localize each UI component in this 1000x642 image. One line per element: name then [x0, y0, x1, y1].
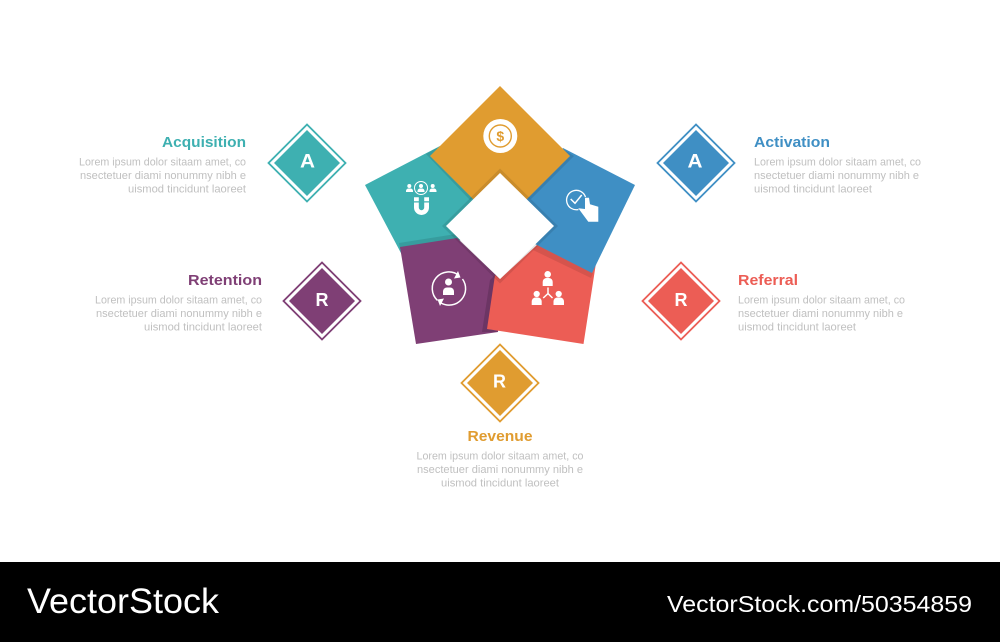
- Retention text: Lorem ipsum dolor sitaam amet, co: [95, 294, 262, 306]
- Activation text: nsectetuer diami nonummy nibh e: [754, 170, 919, 182]
- footer logo wordmark: VectorStock: [27, 582, 220, 621]
- Acquisition text: [79, 134, 246, 196]
- segment: activation (blue): [500, 148, 635, 273]
- Revenue text: uismod tincidunt laoreet: [441, 478, 559, 490]
- Activation text: Lorem ipsum dolor sitaam amet, co: [754, 156, 921, 168]
- icon: hand tapping check: [567, 190, 598, 222]
- Referral text: [738, 272, 905, 334]
- segment: acquisition (teal): [365, 146, 500, 255]
- Retention text: nsectetuer diami nonummy nibh e: [96, 308, 262, 320]
- segment: revenue (orange): [430, 86, 570, 226]
- Retention text: Retention: [188, 272, 262, 289]
- icon: dollar coin: $: [496, 128, 504, 144]
- footer bar: [0, 562, 1000, 642]
- icon: magnet attracting people: [406, 182, 436, 215]
- Revenue text: Revenue: [468, 428, 532, 445]
- Acquisition text: Acquisition: [162, 134, 246, 151]
- Retention text: [95, 272, 262, 334]
- segment: retention (purple): [400, 238, 500, 344]
- Referral badge: R: [674, 290, 688, 310]
- icon: retention cycle: [432, 271, 466, 306]
- Referral text: Referral: [738, 272, 798, 289]
- Acquisition badge: [268, 124, 346, 202]
- Revenue badge: [462, 344, 538, 422]
- Acquisition text: nsectetuer diami nonummy nibh e: [80, 170, 246, 182]
- Activation text: uismod tincidunt laoreet: [754, 184, 872, 196]
- center diamond: [446, 173, 554, 279]
- item: Acquisition: [79, 124, 346, 202]
- Retention badge: R: [316, 290, 328, 310]
- center diamond shadow: [442, 168, 558, 284]
- Activation text: Activation: [754, 134, 830, 151]
- Referral text: Lorem ipsum dolor sitaam amet, co: [738, 294, 905, 306]
- item: Revenue: [416, 344, 584, 490]
- Revenue badge: R: [493, 372, 506, 392]
- pentagon chart: [365, 86, 635, 344]
- Referral badge: [642, 262, 720, 340]
- Acquisition text: uismod tincidunt laoreet: [128, 184, 246, 196]
- footer image id: VectorStock.com/50354859: [667, 591, 972, 617]
- Revenue text: [416, 428, 584, 490]
- Acquisition badge: A: [300, 152, 315, 172]
- Acquisition text: Lorem ipsum dolor sitaam amet, co: [79, 156, 246, 168]
- Activation badge: [658, 124, 734, 202]
- item: Activation: [658, 124, 921, 202]
- Revenue text: Lorem ipsum dolor sitaam amet, co: [416, 450, 584, 462]
- item: Retention: [95, 262, 360, 340]
- icon: dollar coin: [483, 119, 517, 153]
- segment: referral (red): [487, 245, 596, 344]
- item: Referral: [642, 262, 905, 340]
- Revenue text: nsectetuer diami nonummy nibh e: [417, 464, 583, 476]
- Activation badge: A: [688, 152, 703, 172]
- Referral text: nsectetuer diami nonummy nibh e: [738, 308, 903, 320]
- Activation text: [754, 134, 921, 196]
- Retention badge: [284, 262, 360, 340]
- Retention text: uismod tincidunt laoreet: [144, 322, 262, 334]
- icon: person hierarchy: [532, 271, 564, 305]
- Referral text: uismod tincidunt laoreet: [738, 322, 856, 334]
